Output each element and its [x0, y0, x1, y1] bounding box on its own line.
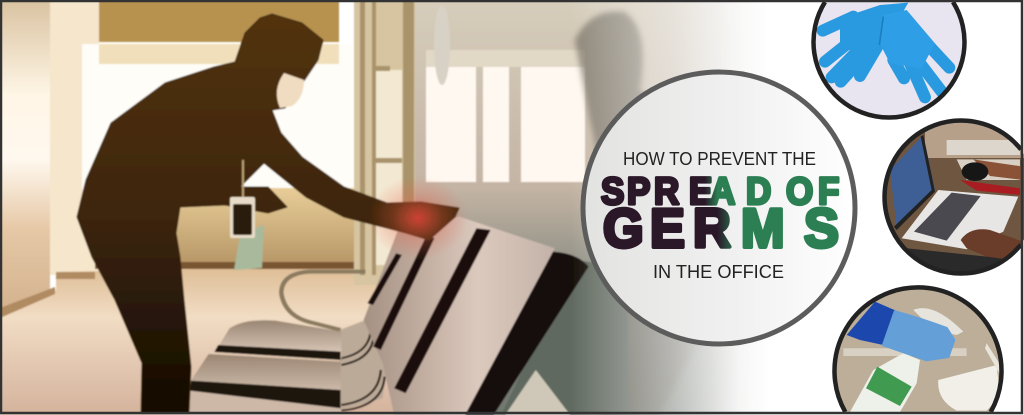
- reflected window grille: [426, 50, 585, 67]
- seat one: [216, 320, 341, 358]
- ceiling panel: [99, 0, 339, 42]
- laptop ring: [885, 120, 1021, 274]
- door bars: [360, 0, 414, 275]
- reflection background: [415, 0, 770, 415]
- laptop base: [902, 190, 1018, 249]
- photo circle: spray: [833, 287, 1003, 412]
- right glove palm: [881, 10, 935, 68]
- backdrop: [886, 132, 1024, 257]
- id badge: [230, 197, 255, 238]
- red glow on hand: [368, 176, 468, 260]
- laptop image: [884, 120, 1024, 277]
- circle background: [583, 72, 855, 344]
- backrest shadow band: [465, 252, 589, 415]
- mouse: [962, 162, 988, 181]
- panel: cleaning photo: [0, 0, 770, 415]
- seat bands: [189, 345, 341, 408]
- door frame: [354, 0, 416, 285]
- chair scene: [163, 217, 628, 415]
- chair side curves: [341, 333, 385, 411]
- armrest: [281, 272, 365, 330]
- glove fold: [879, 17, 883, 45]
- radiator: [176, 188, 354, 262]
- photo circle: gloves: [812, 2, 966, 118]
- left glove palm: [840, 2, 908, 50]
- title line four: IN THE OFFICE: [653, 261, 784, 282]
- lower reflected seat: [501, 260, 628, 415]
- screen frame: [894, 135, 935, 230]
- backrest stripes: [367, 228, 491, 393]
- spray ring: [835, 287, 1002, 412]
- seat two: [191, 354, 341, 407]
- wall clock: [434, 5, 450, 85]
- keyboard: [914, 193, 981, 241]
- gloves image: [812, 2, 966, 118]
- face mask: [277, 73, 304, 108]
- bottle body: [850, 353, 920, 412]
- left glove fingers: [823, 17, 878, 82]
- left wall: [0, 0, 50, 318]
- chair side frame: [340, 320, 387, 411]
- wall handle: [985, 343, 999, 373]
- floor: [0, 264, 420, 415]
- fade to white: [570, 0, 770, 415]
- title line one: HOW TO PREVENT THE: [623, 148, 816, 169]
- title line three: GERMS: [603, 198, 839, 259]
- lanyard: [242, 160, 244, 198]
- reflected windows: [426, 50, 585, 182]
- spray image: [833, 288, 1003, 412]
- bottle label: [866, 367, 912, 406]
- baseboard: [0, 272, 95, 318]
- man silhouette: [77, 14, 459, 413]
- right glove fingers: [893, 43, 949, 97]
- spray bottle: [234, 225, 264, 270]
- backrest: [364, 217, 555, 415]
- red mouse pad: [960, 180, 1020, 195]
- lower window wall: [82, 190, 176, 270]
- spray group: [843, 302, 1000, 412]
- gloved hand: [883, 312, 954, 360]
- toilet: [938, 365, 1000, 411]
- reflected floor: [505, 370, 570, 415]
- hand on mouse: [973, 159, 1023, 180]
- id badge screen: [233, 204, 252, 235]
- seat three: [163, 390, 341, 415]
- gloves ring: [814, 2, 964, 118]
- desk shadow: [907, 248, 1024, 277]
- background shelf: [947, 140, 1020, 155]
- desk background: [925, 122, 1024, 158]
- pillar: [50, 0, 99, 275]
- door glass: [376, 70, 402, 265]
- window light: [82, 44, 362, 194]
- spray head: [913, 308, 963, 335]
- screen: [890, 135, 935, 227]
- photo circle: laptop: [884, 120, 1024, 277]
- paper: [957, 159, 1020, 180]
- hand on trackpad: [960, 229, 1021, 259]
- backdrop: [812, 2, 966, 118]
- backdrop: [833, 288, 1003, 412]
- sleeve: [847, 302, 898, 345]
- grab rail: [843, 348, 967, 356]
- title circle: [583, 72, 855, 344]
- laptop group: [890, 135, 1024, 277]
- window grille: [99, 44, 339, 64]
- reflected figure: [575, 12, 720, 415]
- back wall baseboard: [95, 262, 356, 269]
- title line two: SPREAD OF: [601, 170, 839, 212]
- gloves: [823, 3, 949, 97]
